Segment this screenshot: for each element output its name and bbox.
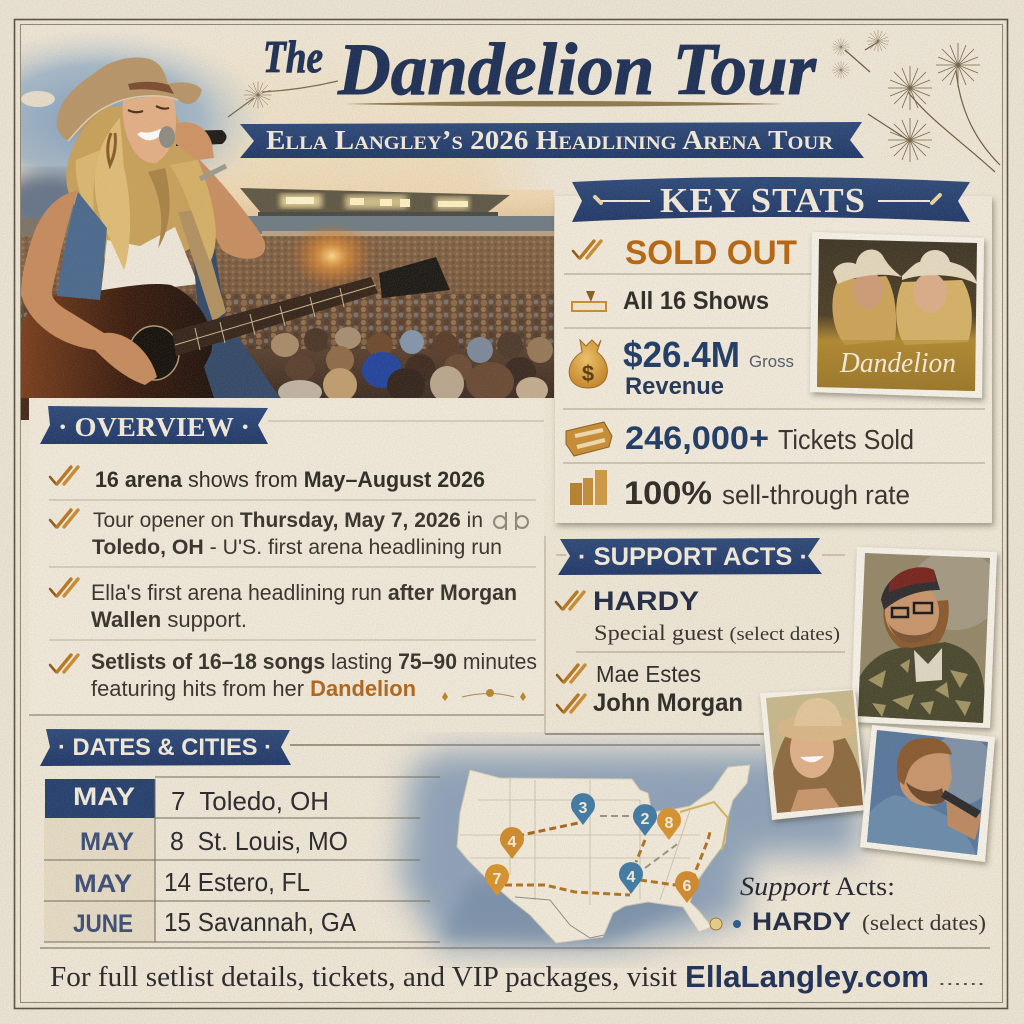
- album cover: Dandelion: [839, 348, 956, 379]
- pin 4 south: 4: [627, 869, 636, 886]
- dandelions top right: [832, 30, 1000, 172]
- pin 3: [571, 793, 595, 825]
- stat: gross revenue: $26.4M: [623, 334, 740, 375]
- bullet: setlists: [50, 649, 537, 701]
- cowboy hat: [57, 58, 202, 141]
- row: May 8: [80, 826, 348, 856]
- bullet: setlists: featuring hits from her Dandelion: [91, 676, 416, 701]
- pin 6: 6: [683, 878, 692, 895]
- singer: [21, 58, 450, 398]
- stat: gross revenue: Gross: [749, 352, 794, 371]
- hair front: [95, 118, 130, 270]
- stat: all 16 shows: All 16 Shows: [623, 287, 769, 315]
- crowd: [21, 222, 554, 404]
- support acts note: Support Acts:: [740, 872, 895, 901]
- album cover: [810, 232, 984, 398]
- pin 6: [675, 871, 699, 903]
- face: [123, 94, 176, 163]
- row: May 14: [74, 867, 310, 898]
- stat: tickets sold: 246,000+: [625, 420, 769, 456]
- bullet: first arena run: Wallen support.: [91, 607, 247, 632]
- stat: gross revenue: $: [582, 361, 594, 386]
- pin 4 south: [619, 862, 643, 894]
- act: Hardy: Special guest (select dates): [594, 620, 840, 645]
- raised arm: [198, 158, 265, 259]
- row: May 7: MAY: [73, 783, 135, 811]
- stat: tickets sold: [566, 420, 914, 456]
- dates table: [44, 777, 440, 942]
- act: Mae Estes: Mae Estes: [596, 661, 701, 687]
- row: May 7: 7 Toledo, OH: [171, 786, 329, 816]
- row: June 15: 15 Savannah, GA: [164, 907, 357, 937]
- stat: sell-through: sell-through rate: [722, 480, 910, 510]
- act: Hardy: [556, 586, 840, 645]
- support ribbon: [558, 538, 822, 575]
- pin 4 west: [500, 827, 524, 859]
- support acts note: (select dates): [862, 910, 986, 935]
- pin 2: [633, 804, 657, 836]
- pin 4 west: 4: [508, 834, 517, 851]
- pin 2: 2: [641, 811, 650, 828]
- dates ribbon: · DATES & CITIES ·: [58, 734, 272, 761]
- photo: Mae Estes: [760, 688, 866, 820]
- album figures: [832, 276, 896, 345]
- dates and cities section: [40, 729, 860, 948]
- stat: sell-through: [570, 470, 910, 511]
- US map: [457, 765, 750, 943]
- hair back: [66, 105, 196, 259]
- hero image: singer on stage with arena crowd: [0, 25, 554, 404]
- bullet: tour opener: [50, 509, 502, 559]
- title: Dandelion Tour: [337, 29, 817, 111]
- acoustic guitar: [21, 284, 214, 398]
- guitar strap: [178, 210, 226, 322]
- stat: gross revenue: Revenue: [625, 373, 724, 400]
- small dandelion by title: [228, 81, 338, 117]
- overview panel background: [29, 398, 544, 715]
- overview ribbon: · OVERVIEW ·: [58, 412, 250, 442]
- stat: sold out: SOLD OUT: [625, 234, 797, 272]
- row: May 7: [73, 783, 329, 816]
- row: May 8: MAY: [80, 828, 134, 856]
- stadium stand: [21, 188, 554, 237]
- row: May 14: 14 Estero, FL: [164, 867, 310, 897]
- pin 7: 7: [493, 871, 502, 888]
- denim vest: [57, 192, 107, 300]
- act: Hardy: HARDY: [593, 586, 699, 616]
- panel: support acts: [545, 536, 855, 734]
- pin 7: [485, 864, 509, 896]
- hero bottom-left sliver: [21, 398, 29, 420]
- dates ribbon: [40, 729, 291, 766]
- row: June 15: JUNE: [73, 910, 133, 938]
- map background wash: [400, 752, 860, 948]
- ornament: [442, 689, 526, 701]
- ornament: [494, 512, 528, 530]
- bullet: first arena run: [50, 579, 517, 632]
- panel: overview: [29, 398, 544, 715]
- title: The: [263, 31, 323, 82]
- title underline: [345, 101, 782, 106]
- support acts note: [733, 872, 986, 936]
- photo: John Morgan: [860, 725, 995, 862]
- key stats ribbon: [572, 177, 970, 222]
- bullet: first arena run: Ella's first arena headlining run after Morgan: [91, 580, 517, 605]
- stat: sell-through: 100%: [624, 475, 712, 511]
- white top: [101, 227, 196, 290]
- guitar neck and headstock: [172, 277, 378, 356]
- panel: key stats: [555, 177, 992, 523]
- pin 8: [657, 808, 681, 840]
- footer: For full setlist details, tickets, and VIP packages, visit: [50, 962, 677, 993]
- jeans and right vest: [194, 246, 280, 398]
- act: John Morgan: John Morgan: [593, 689, 743, 717]
- coin at Florida: [710, 918, 722, 930]
- pin 8: 8: [665, 815, 674, 832]
- table header cell: [45, 779, 155, 818]
- row: June 15: [73, 907, 357, 938]
- footer: [40, 948, 990, 994]
- stat: gross revenue: [569, 334, 794, 400]
- stat: tickets sold: Tickets Sold: [778, 424, 914, 455]
- sky: [21, 36, 554, 236]
- bullet: tour opener: Tour opener on Thursday, May 7, 2026 in: [93, 509, 483, 532]
- microphone and hand: [176, 130, 226, 146]
- bullet: setlists: Setlists of 16–18 songs lasting 75–90 minutes: [91, 649, 537, 674]
- bullet: 16 arena shows: 16 arena shows from May–August 2026: [95, 467, 485, 492]
- stats card: [555, 196, 992, 523]
- support ribbon: · SUPPORT ACTS ·: [578, 543, 808, 571]
- key stats ribbon: KEY STATS: [660, 181, 866, 220]
- support acts note: HARDY: [752, 908, 851, 936]
- support panel background: [545, 536, 855, 734]
- overview ribbon: [40, 406, 268, 444]
- bullet: tour opener: Toledo, OH - U'S. first arena headlining run: [92, 536, 502, 559]
- pin 3: 3: [579, 800, 588, 817]
- subtitle ribbon: Ella Langley’s 2026 Headlining Arena Tour: [266, 125, 833, 155]
- row: May 8: 8 St. Louis, MO: [170, 826, 348, 856]
- photo: Hardy: [851, 547, 1000, 730]
- footer: ......: [938, 969, 985, 989]
- row: May 14: MAY: [74, 870, 132, 898]
- tour routes: [505, 802, 728, 895]
- left arm and strumming hand: [21, 190, 157, 385]
- footer: EllaLangley.com: [685, 959, 929, 994]
